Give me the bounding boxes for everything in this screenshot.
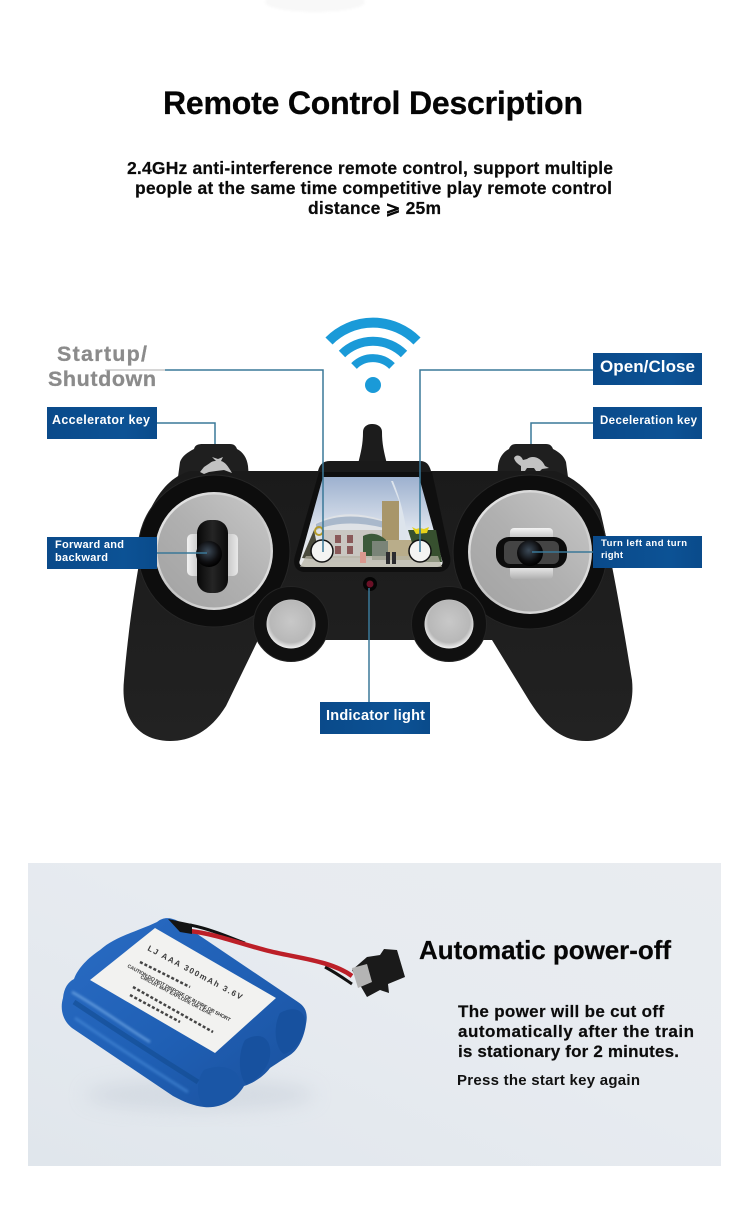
- right joystick wheel: [453, 475, 607, 629]
- screen with building photo: [299, 477, 443, 567]
- subtitle text block: people at the same time competitive play remote control: [135, 178, 612, 198]
- right small button: [412, 586, 486, 662]
- battery body: [62, 918, 307, 1107]
- battery photo: CIRCUIT MAY EXPLODE OR LEAK: [139, 974, 213, 1017]
- label: Accelerator key: [47, 407, 157, 439]
- label: Open/Close: [593, 353, 702, 385]
- battery connector: [352, 949, 405, 997]
- battery photo: [62, 918, 405, 1111]
- panel description: is stationary for 2 minutes.: [458, 1042, 679, 1061]
- label: Open/Close: Open/Close: [600, 357, 695, 376]
- panel: automatic power-off: [28, 863, 721, 1166]
- controller body: [123, 461, 632, 741]
- controller antenna: [358, 424, 387, 464]
- label: Deceleration key: Deceleration key: [600, 415, 698, 427]
- panel heading: Automatic power-off: [419, 935, 671, 965]
- label: Turn left and turn right: Turn left and turn: [601, 538, 687, 549]
- icon: rabbit: [200, 457, 232, 474]
- indicator LED: [363, 577, 377, 591]
- label: Accelerator key: Accelerator key: [52, 413, 150, 427]
- label: Startup/Shutdown: [48, 342, 156, 391]
- panel description: automatically after the train: [458, 1022, 694, 1041]
- subtitle text block: distance ⩾ 25m: [308, 198, 441, 218]
- subtitle text block: [127, 158, 613, 218]
- icon: turtle: [514, 456, 549, 471]
- white power and open buttons on screen: [311, 530, 431, 562]
- battery photo: LJ AAA 300mAh 3.6V: [146, 944, 244, 1002]
- panel description: The power will be cut off: [458, 1002, 664, 1021]
- remote controller: [123, 424, 632, 741]
- label: Turn left and turn right: right: [601, 550, 624, 561]
- battery label: [90, 928, 276, 1053]
- panel note: Press the start key again: [457, 1072, 640, 1089]
- icon: wifi signal: [329, 323, 417, 393]
- left small button: [254, 586, 328, 662]
- callout leader lines: [105, 370, 593, 702]
- top edge smudge: [265, 0, 365, 12]
- right trigger: decelerator: [496, 444, 570, 492]
- label: Indicator light: [320, 702, 430, 734]
- panel description: [458, 1002, 694, 1061]
- label: Startup/Shutdown: Shutdown: [48, 367, 156, 391]
- battery photo: CAUTION:DO NOT DISPOSE OF IN FIRE OR SHORT: [126, 963, 231, 1023]
- label: Deceleration key: [593, 407, 702, 439]
- label: Indicator light: Indicator light: [326, 708, 425, 724]
- label: Forward and backward: Forward and: [55, 539, 124, 551]
- title: Remote Control Description: [163, 85, 583, 121]
- battery end cells: [276, 1009, 305, 1054]
- label: Forward and backward: backward: [55, 552, 108, 564]
- battery wires: [190, 925, 352, 984]
- screen bezel: [294, 472, 450, 572]
- left joystick wheel: [138, 475, 290, 627]
- label: Startup/Shutdown: Startup/: [57, 342, 147, 366]
- label: Turn left and turn right: [593, 536, 702, 568]
- left trigger: accelerator: [176, 444, 250, 492]
- subtitle text block: 2.4GHz anti-interference remote control, support multiple: [127, 158, 613, 178]
- label: Forward and backward: [47, 537, 157, 569]
